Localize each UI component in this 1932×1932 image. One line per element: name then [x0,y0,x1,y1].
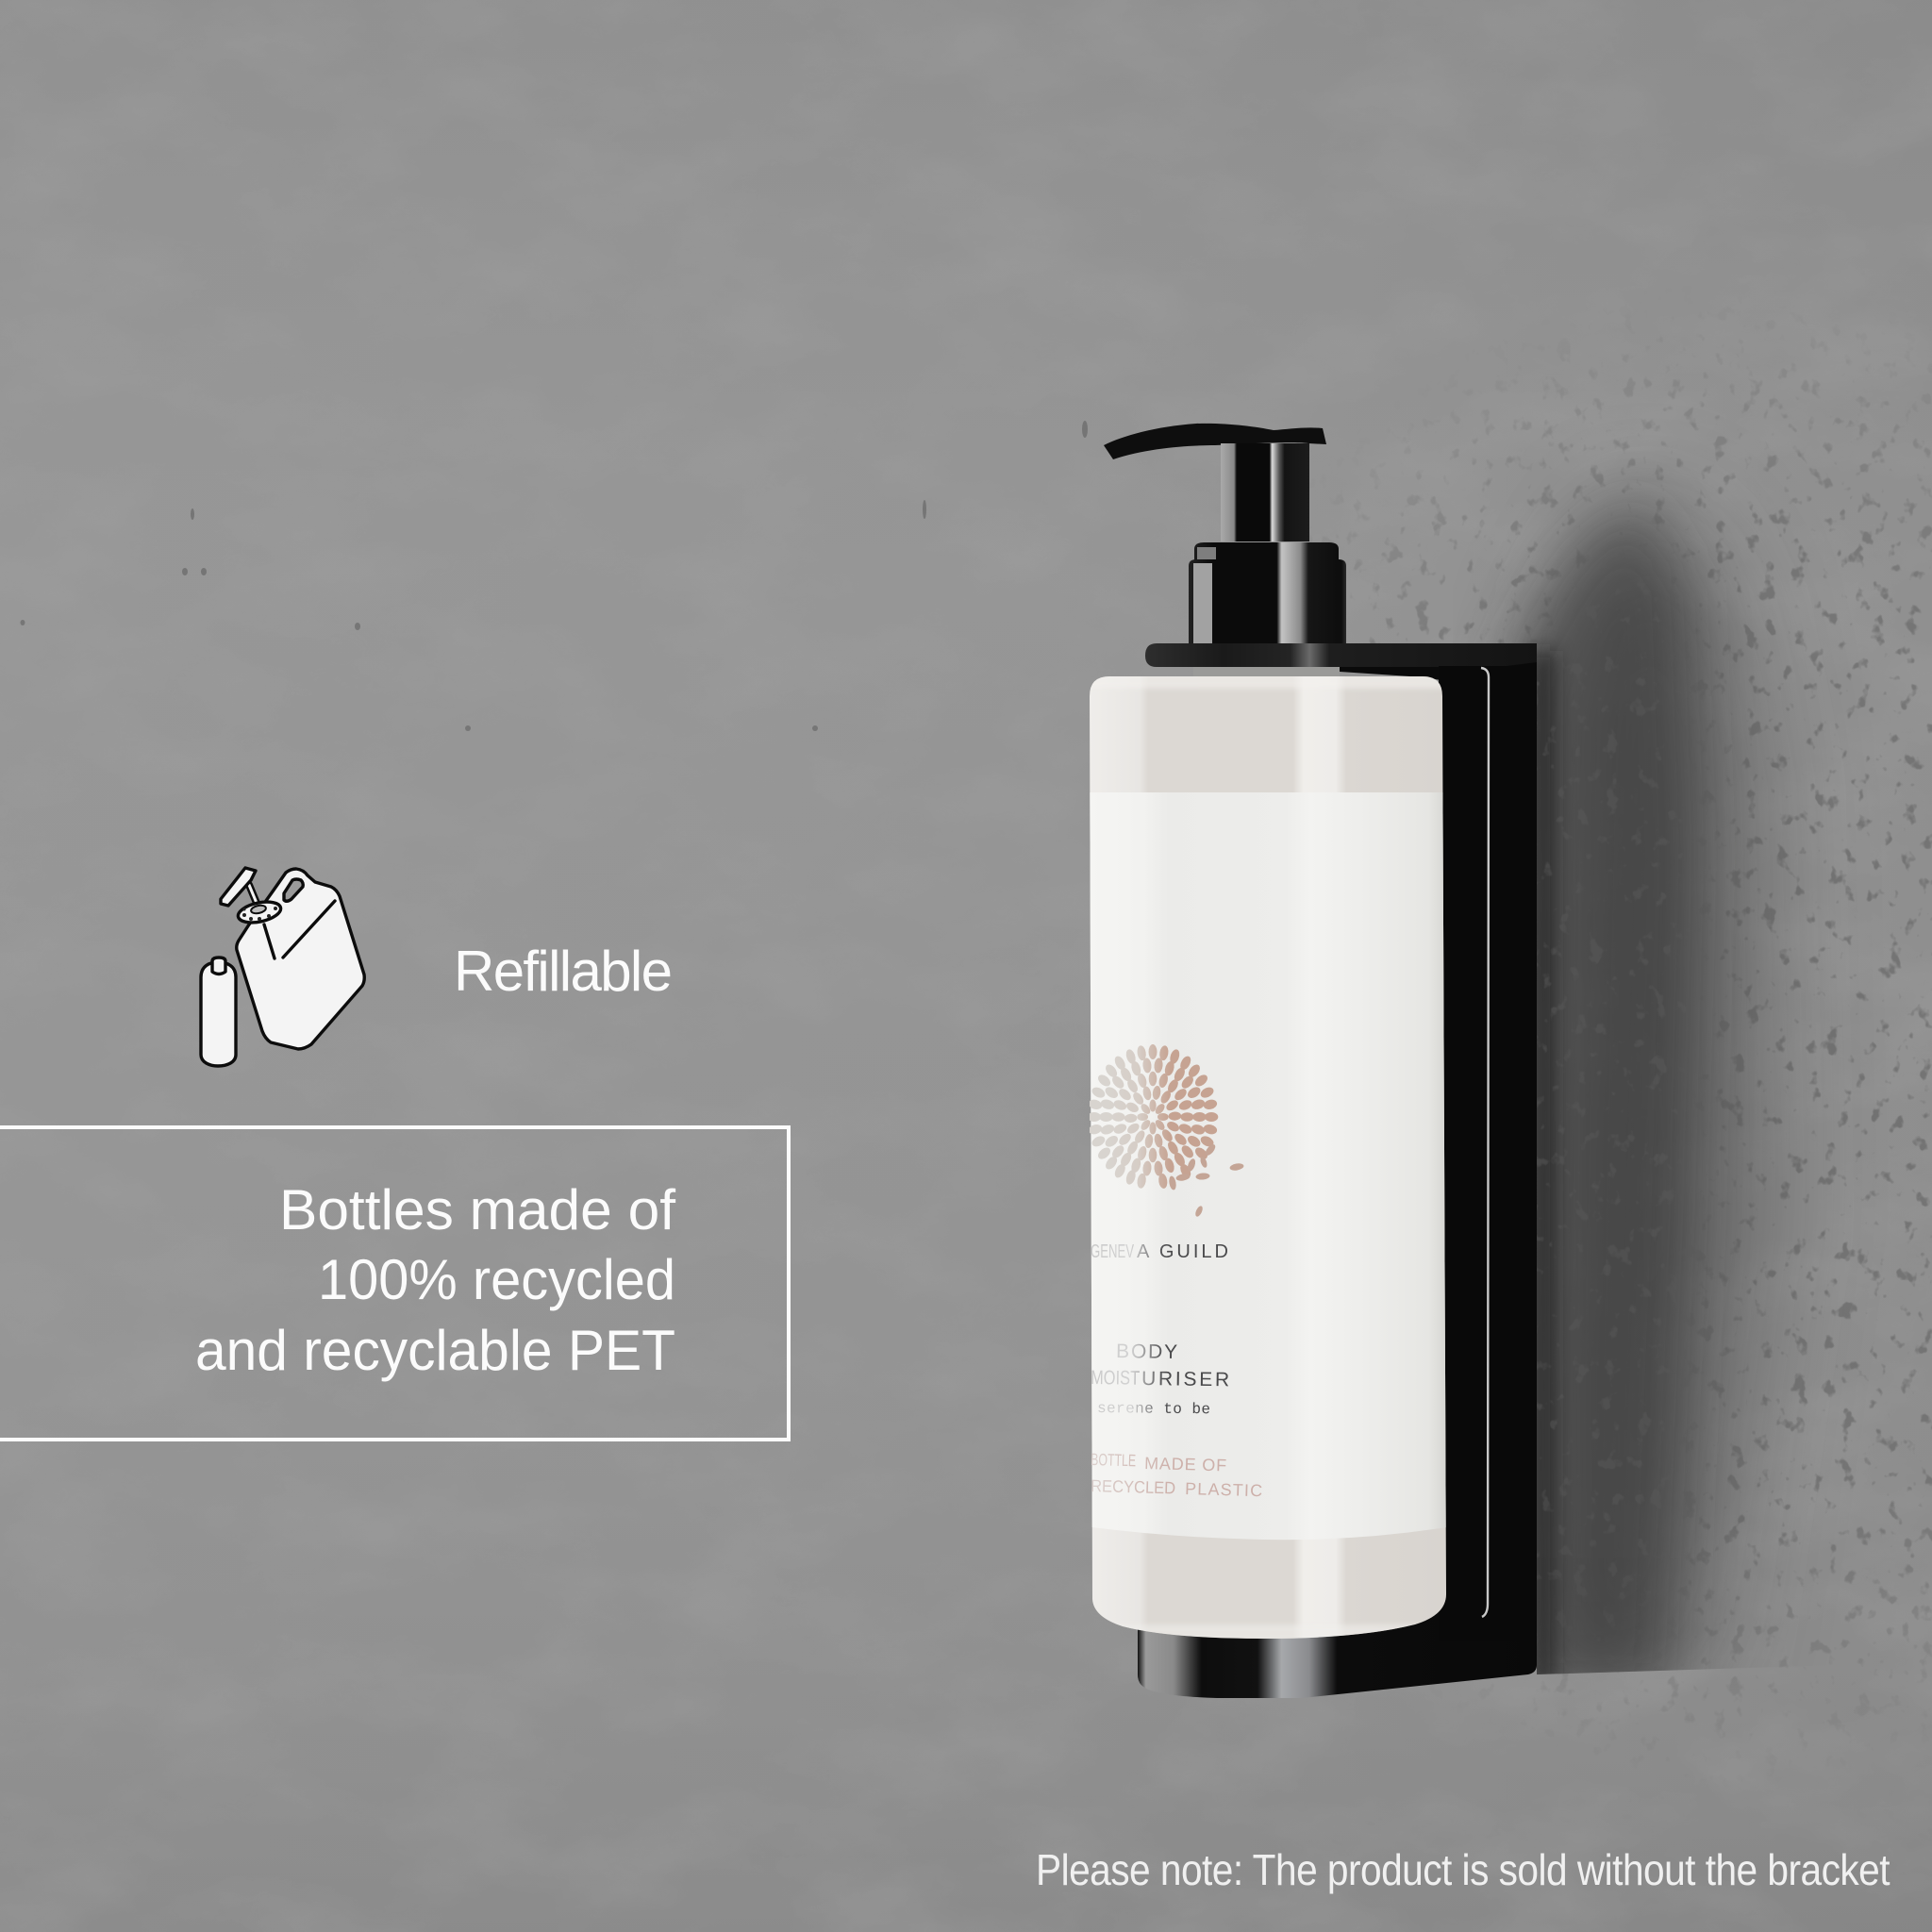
recycled plastic note on label: BOTTLE [1091,1450,1136,1470]
callout text: 100% recycled [318,1248,675,1311]
bottle bottom rim highlight [1118,1623,1421,1639]
tagline: serene to be [1097,1400,1210,1418]
bracket underside of plate [1340,667,1491,689]
icon: refill canister and bottle [201,868,364,1066]
pump collar [1194,542,1339,560]
flower logo [1090,1038,1245,1218]
callout frame [0,1127,789,1440]
recycled plastic note on label: MADE OF [1144,1454,1226,1474]
bottle label [1085,792,1453,1540]
callout text [195,1178,675,1382]
loose petals [1168,1142,1244,1218]
brand name: A GUILD [1137,1241,1228,1262]
callout text: Bottles made of [279,1178,675,1241]
icon: pump stem core [249,885,258,908]
bottle [1085,672,1453,1643]
recycled plastic note on label: PLASTIC [1185,1479,1262,1500]
product name [1091,1341,1229,1391]
pump nozzle [1104,424,1326,459]
pump dispenser [1104,424,1346,645]
bottle top rim highlight [1091,676,1441,691]
brand name [1091,1241,1228,1262]
recycled plastic note on label: RECYCLED [1091,1476,1175,1498]
icon: pump disc [236,898,283,926]
bracket shadow on wall [1509,500,1764,1698]
heading: refillable: Refillable [454,940,673,1003]
icon: jerrycan [237,869,364,1049]
product name: MOIST [1091,1367,1140,1390]
recycled plastic note on label [1091,1450,1262,1500]
bracket edge highlight [1481,668,1489,1617]
bracket top plate [1145,643,1537,668]
pump cap [1189,559,1346,645]
callout text: and recyclable PET [195,1319,675,1382]
wall bracket [1138,643,1537,1698]
icon: pump stem [249,885,258,908]
bracket back and base [1138,643,1537,1698]
bottle body [1085,672,1453,1643]
product name: BODY [1116,1341,1177,1363]
product name: URISER [1141,1368,1229,1391]
wall surface pits [1353,355,1932,1711]
brand name: GENEV [1091,1241,1134,1262]
pump stem [1221,443,1309,541]
panel: recycled PET callout [0,1127,789,1440]
icon: small bottle [201,958,236,1066]
bracket arm shading [1439,666,1537,1641]
icon: pump handle [221,868,256,906]
bottle neck [1193,667,1340,677]
